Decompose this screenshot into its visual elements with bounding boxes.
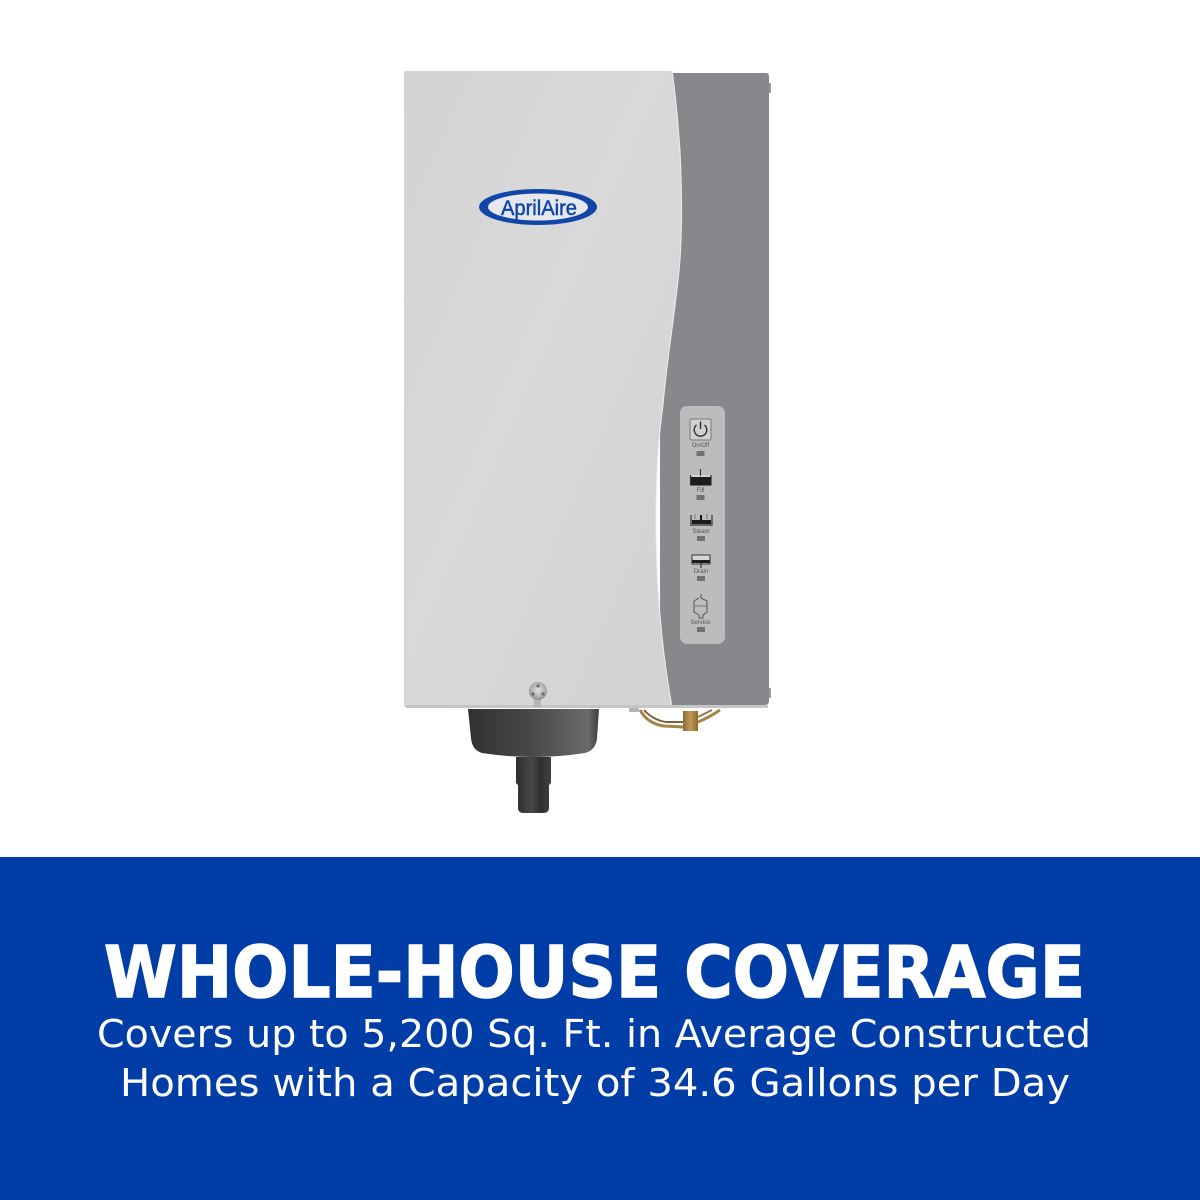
on/off button [690, 419, 711, 456]
logo: AprilAire: AprilAire [501, 197, 577, 220]
subtitle [97, 1012, 1091, 1105]
heading: WHOLE-HOUSE COVERAGE [104, 931, 1085, 1014]
blue banner [0, 857, 1200, 1200]
fill indicator: Fill [697, 488, 704, 494]
subtitle: Covers up to 5,200 Sq. Ft. in Average Constructed [97, 1012, 1091, 1056]
steam indicator [691, 514, 712, 541]
brass water fitting [629, 708, 720, 731]
fill indicator [690, 469, 711, 500]
logo: AprilAire [479, 189, 597, 225]
drain indicator [692, 555, 710, 581]
service indicator [690, 594, 711, 632]
subtitle: Homes with a Capacity of 34.6 Gallons per Day [120, 1061, 1070, 1105]
service indicator: Service [690, 620, 711, 626]
drain cup [468, 709, 599, 813]
control panel [680, 406, 725, 644]
steam indicator: Steam [692, 529, 710, 535]
light front cover [404, 71, 682, 707]
on/off button: On/Off [692, 443, 710, 449]
grey side panel [660, 73, 769, 705]
latch knob [529, 682, 547, 707]
product: steam humidifier [404, 71, 771, 813]
drain indicator: Drain [694, 569, 708, 575]
